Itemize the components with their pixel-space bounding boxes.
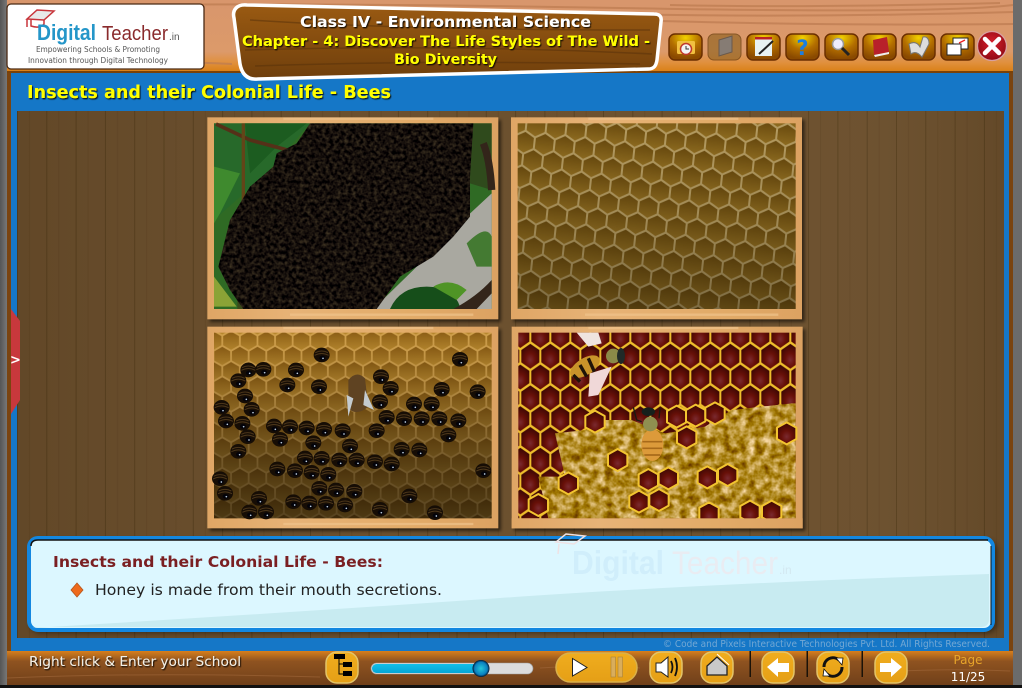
play and pause pill (556, 653, 637, 682)
page label: Page (953, 653, 983, 667)
bullet text: Honey is made from their mouth secretions. (95, 581, 442, 599)
icon: index tree (326, 652, 358, 683)
page number: 11/25 (951, 670, 985, 684)
photo: honeycomb with red honey and two bees (512, 327, 805, 531)
icon: forward arrow (875, 652, 907, 683)
divider (862, 651, 863, 677)
toolbar icons (669, 32, 1006, 60)
open honey cells (529, 402, 796, 524)
callout heading: Insects and their Colonial Life - Bees: (53, 553, 383, 571)
logo wordmark: Digital (37, 20, 96, 45)
slide heading: Insects and their Colonial Life - Bees (27, 82, 391, 103)
panel side frame right (1009, 73, 1013, 651)
top wooden header (7, 0, 1013, 73)
logo wordmark: .in (169, 32, 180, 43)
icon: replay (817, 652, 849, 683)
left grey edge (0, 0, 7, 685)
photo: empty honeycomb (511, 117, 805, 322)
divider (750, 651, 751, 677)
icon: help question mark (786, 34, 819, 60)
icon: home (701, 652, 733, 683)
watermark logo: Digital (572, 544, 664, 581)
icon: help question mark: ? (796, 36, 809, 60)
school label: Right click & Enter your School (29, 654, 241, 670)
divider (806, 651, 808, 677)
copyright line: © Code and Pixels Interactive Technologies Pvt. Ltd. All Rights Reserved. (663, 639, 990, 650)
chapter title line two: Bio Diversity (394, 52, 497, 68)
logo tagline line two: Innovation through Digital Technology (28, 56, 168, 65)
lower bee (633, 407, 663, 461)
icon: open book (902, 34, 935, 60)
logo panel (7, 4, 204, 69)
icon: notepad and pen (747, 34, 780, 60)
icon: magnifier (825, 34, 858, 60)
icon: window resize (941, 34, 974, 60)
watermark logo: Teacher (672, 545, 778, 581)
upper bee (566, 333, 625, 397)
icon: back arrow (762, 652, 794, 683)
bottom control bar (7, 651, 1013, 685)
logo tagline line one: Empowering Schools & Promoting (36, 45, 160, 54)
icon: diamond bullet (71, 583, 83, 597)
title badge (234, 5, 661, 79)
wooden content board (17, 111, 1004, 638)
panel side frame left (7, 73, 11, 651)
slider (371, 660, 533, 677)
wax capped area (538, 403, 796, 518)
icon: dictionary (863, 34, 896, 60)
icon: reference book (708, 34, 741, 60)
watermark logo: .in (779, 563, 792, 577)
side menu tab (10, 309, 21, 414)
text callout box (29, 534, 997, 633)
chapter title line one: Chapter - 4: Discover The Life Styles of The Wild - (242, 34, 650, 50)
watermark logo (556, 534, 792, 581)
arrow: open side menu: > (10, 353, 21, 368)
class title: Class IV - Environmental Science (300, 13, 591, 31)
icon: close button (978, 32, 1006, 60)
photo: honeycomb with bees (207, 327, 501, 531)
bees on comb (212, 348, 491, 520)
logo wordmark: Teacher (102, 23, 168, 45)
icon: speaker (650, 652, 682, 683)
bee swarm mass (218, 123, 473, 309)
icon: history folder (669, 34, 702, 60)
icon: graduation cap (27, 10, 54, 27)
right grey edge (1013, 0, 1022, 685)
photo: bee swarm on branch (207, 117, 501, 322)
